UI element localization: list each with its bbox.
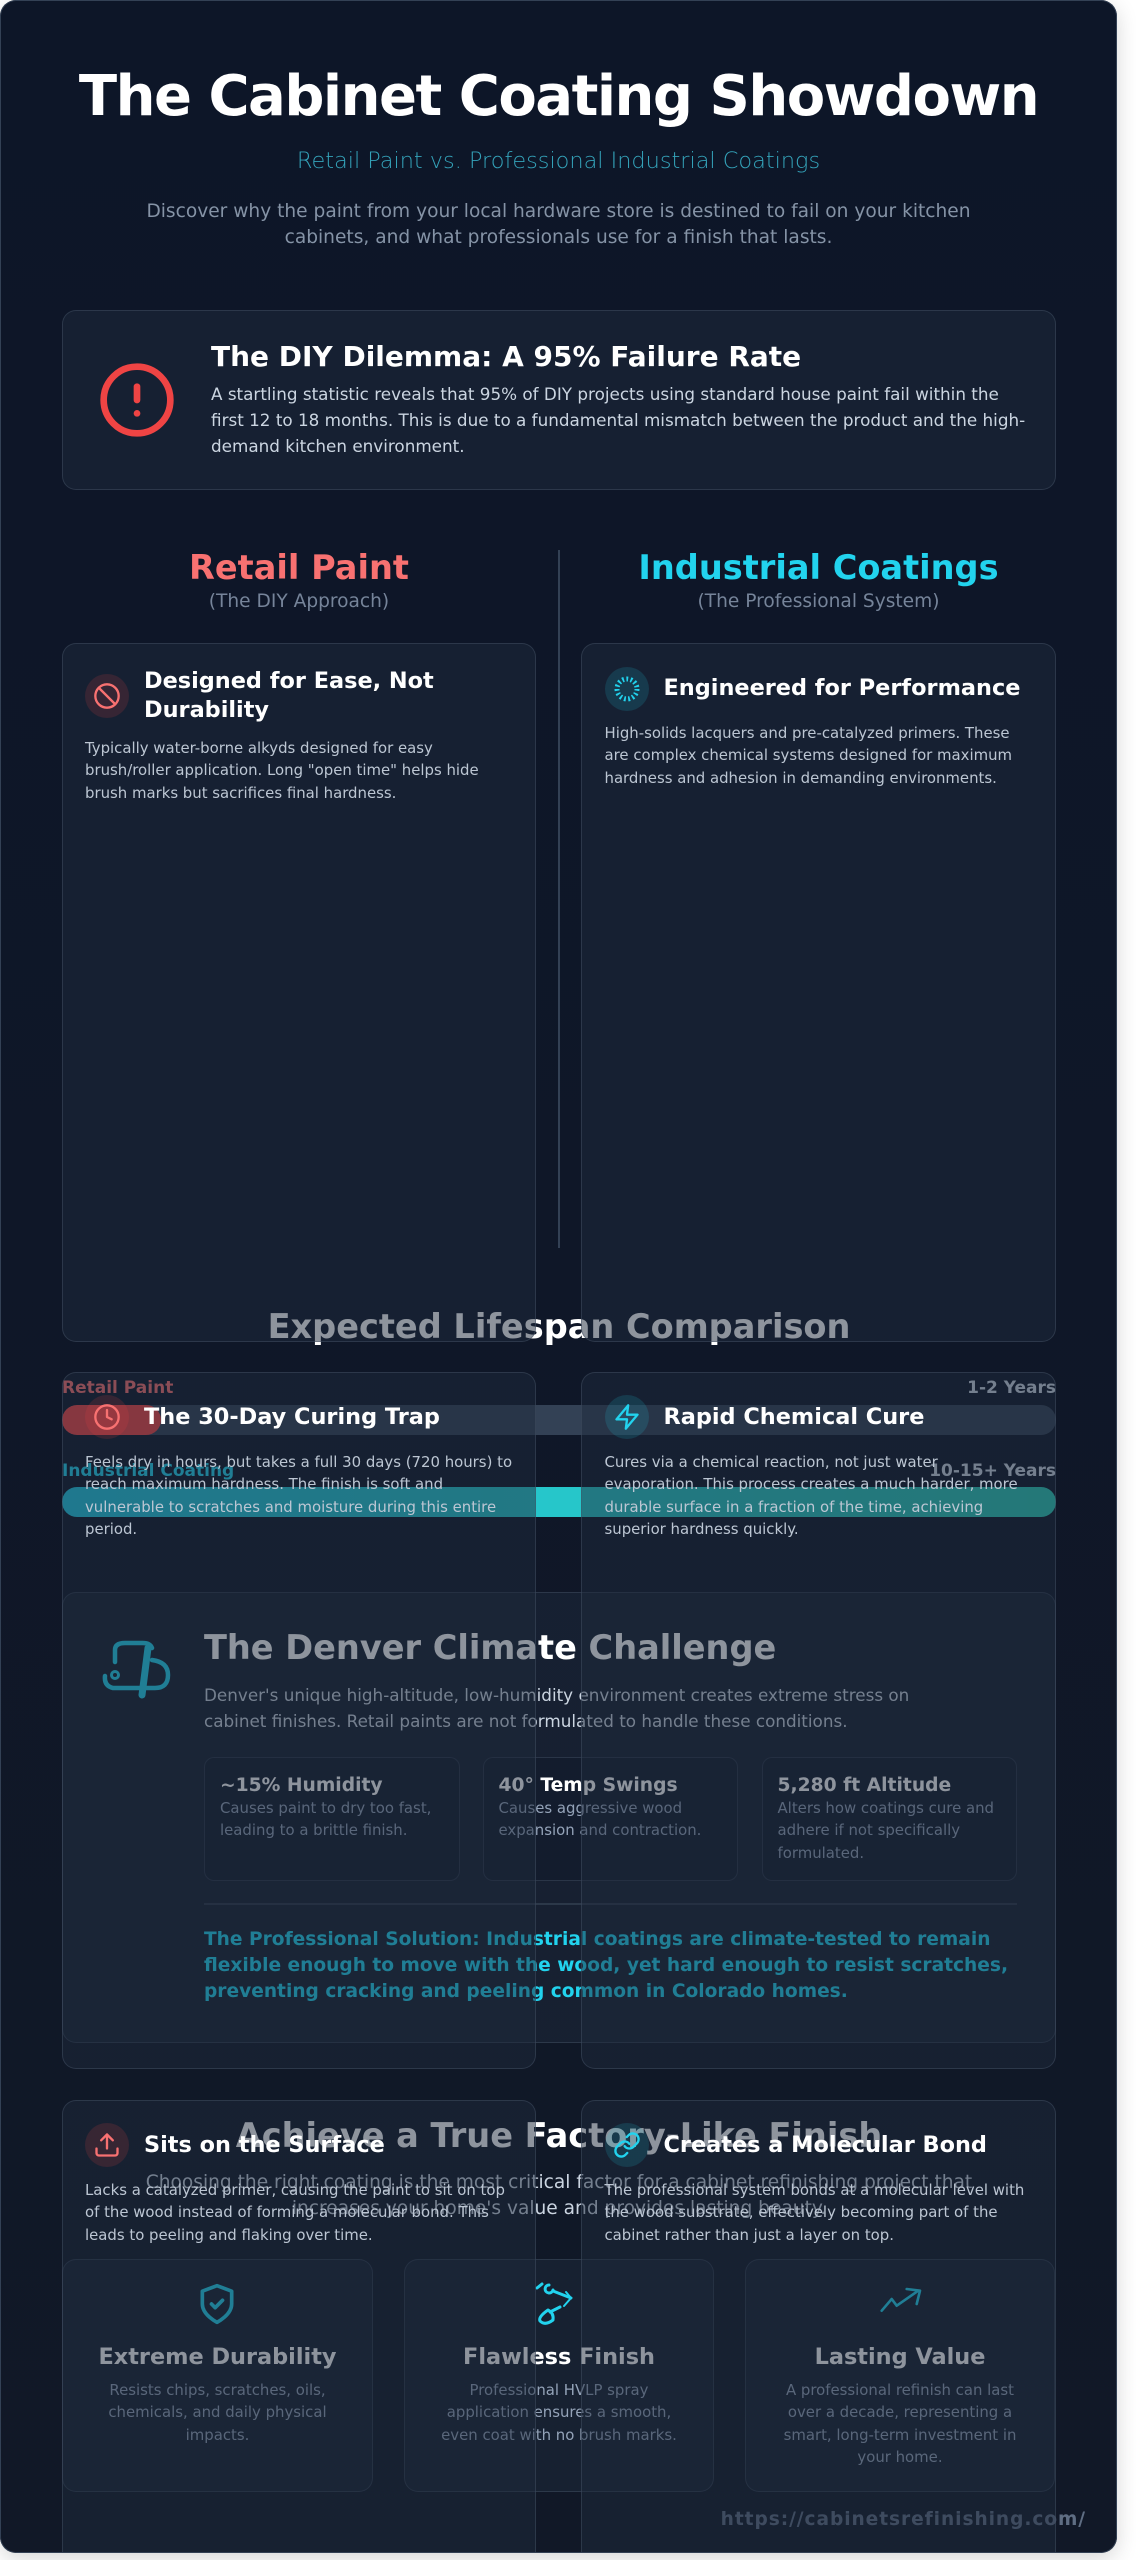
benefit: flawless finish: Professional HVLP spray <box>470 2381 648 2399</box>
card text: hardness and adhesion in demanding environments. <box>604 769 997 787</box>
card: molecular bond <box>581 2100 1056 2560</box>
card text: durable surface in a fraction of the time, achieving <box>604 1498 983 1516</box>
benefit: lasting value: your home. <box>857 2448 943 2466</box>
card text <box>85 2181 505 2244</box>
stat: humidity <box>204 1757 460 1881</box>
card text <box>85 1453 512 1538</box>
benefit: extreme durability: Resists chips, scratches, oils, <box>109 2381 326 2399</box>
dilemma heading: The DIY Dilemma: A 95% Failure Rate <box>211 340 801 373</box>
footer url: https://cabinetsrefinishing.com/ <box>721 2509 1086 2530</box>
card heading <box>144 668 434 723</box>
panel: Denver climate challenge <box>62 1592 1056 2043</box>
stat: humidity: ~15% Humidity <box>220 1775 383 1796</box>
benefit: extreme durability: impacts. <box>186 2426 249 2444</box>
icon: spray gun <box>536 2282 572 2325</box>
icon: dotted ring <box>605 667 649 711</box>
card heading: Rapid Chemical Cure <box>664 1404 924 1430</box>
icon: link <box>605 2123 649 2167</box>
icon: clock <box>85 1395 129 1439</box>
card text: superior hardness quickly. <box>604 1520 799 1538</box>
section: lifespan comparison <box>62 1307 1056 1517</box>
card: engineered for performance <box>581 643 1056 1342</box>
column heading: industrial coatings <box>638 548 999 612</box>
stat: altitude: 5,280 ft Altitude <box>778 1775 951 1796</box>
card text: Lacks a catalyzed primer, causing the paint to sit on top <box>85 2181 505 2199</box>
benefit: lasting value: over a decade, representing a <box>788 2403 1012 2421</box>
stat: humidity: leading to a brittle finish. <box>220 1821 407 1839</box>
card text <box>604 1453 1018 1538</box>
stat: altitude <box>762 1757 1017 1881</box>
professional solution text: flexible enough to move with the wood, yet hard enough to resist scratches, <box>204 1955 1008 1976</box>
card heading: Designed for Ease, Not <box>144 668 434 694</box>
benefit: flawless finish: Flawless Finish <box>463 2344 655 2370</box>
intro description: cabinets, and what professionals use for a finish that lasts. <box>285 227 832 248</box>
professional solution text: preventing cracking and peeling common in Colorado homes. <box>204 1981 848 2002</box>
icon: zap <box>605 1395 649 1439</box>
card text: Typically water-borne alkyds designed for easy <box>85 739 433 757</box>
stat: altitude: adhere if not specifically <box>778 1821 960 1839</box>
bar: retail paint: Retail Paint <box>62 1378 173 1398</box>
climate text: cabinet finishes. Retail paints are not formulated to handle these conditions. <box>204 1711 848 1731</box>
climate heading: The Denver Climate Challenge <box>204 1628 776 1667</box>
card: curing trap <box>62 1372 536 2069</box>
dilemma text: first 12 to 18 months. This is due to a fundamental mismatch between the product and the high- <box>211 410 1025 430</box>
panel: DIY dilemma <box>62 310 1056 490</box>
professional solution text <box>204 1929 1008 2002</box>
professional solution text: The Professional Solution: Industrial coatings are climate-tested to remain <box>204 1929 990 1950</box>
conclusion text: Choosing the right coating is the most critical factor for a cabinet refinishing project that <box>146 2172 972 2193</box>
benefit: flawless finish: even coat with no brush marks. <box>441 2426 677 2444</box>
card text: brush/roller application. Long "open time" helps hide <box>85 761 479 779</box>
bar: industrial coating <box>62 1461 1056 1517</box>
benefit: lasting value: smart, long-term investment in <box>784 2426 1016 2444</box>
climate text: Denver's unique high-altitude, low-humidity environment creates extreme stress on <box>204 1685 909 1705</box>
card heading: Sits on the Surface <box>144 2132 385 2158</box>
card text: the wood substrate, effectively becoming part of the <box>604 2203 998 2221</box>
benefit: lasting value: A professional refinish can last <box>786 2381 1014 2399</box>
card heading: Durability <box>144 697 269 723</box>
intro description <box>146 201 971 248</box>
benefit: lasting value: Lasting Value <box>815 2344 985 2370</box>
benefit: extreme durability <box>62 2259 373 2492</box>
benefit: extreme durability: Extreme Durability <box>98 2344 336 2370</box>
card: rapid chemical cure <box>581 1372 1056 2069</box>
conclusion text <box>146 2172 972 2219</box>
title: The Cabinet Coating Showdown <box>79 64 1038 129</box>
column heading: retail paint <box>189 548 409 612</box>
card text: of the wood instead of forming a molecular bond. This <box>85 2203 489 2221</box>
benefit cards row <box>62 2259 1055 2492</box>
climate text <box>204 1685 909 1731</box>
card text <box>604 724 1012 787</box>
icon: trending up <box>880 2288 922 2312</box>
stat: temperature swings: 40° Temp Swings <box>498 1775 678 1796</box>
icon: upload <box>85 2123 129 2167</box>
card: designed for ease <box>62 643 536 1342</box>
benefit: extreme durability: chemicals, and daily physical <box>108 2403 327 2421</box>
dilemma text: A startling statistic reveals that 95% of DIY projects using standard house paint fail within the <box>211 384 999 404</box>
stat: temperature swings: expansion and contraction. <box>498 1821 701 1839</box>
bar: industrial coating: Industrial Coating <box>62 1461 234 1481</box>
card heading: The 30-Day Curing Trap <box>144 1404 440 1430</box>
stat: altitude: Alters how coatings cure and <box>778 1799 994 1817</box>
section: factory finish conclusion <box>62 2116 1055 2492</box>
icon: alert circle <box>100 363 174 437</box>
column heading: retail paint: Retail Paint <box>189 548 409 587</box>
card text: High-solids lacquers and pre-catalyzed primers. These <box>604 724 1010 742</box>
dilemma text: demand kitchen environment. <box>211 436 465 456</box>
card text: cabinet rather than just a layer on top. <box>604 2226 894 2244</box>
card text: leads to peeling and flaking over time. <box>85 2226 373 2244</box>
icon: climate cloud and tool <box>102 1640 170 1698</box>
card text: reach maximum hardness. The finish is soft and <box>85 1475 443 1493</box>
icon: ban <box>85 674 129 718</box>
benefit: flawless finish: application ensures a smooth, <box>447 2403 671 2421</box>
conclusion text: increases your home's value and provides lasting beauty. <box>292 2198 826 2219</box>
stat: humidity: Causes paint to dry too fast, <box>220 1799 431 1817</box>
benefit: lasting value <box>745 2259 1055 2492</box>
card text: brush marks but sacrifices final hardness. <box>85 784 396 802</box>
benefit: flawless finish <box>404 2259 714 2492</box>
conclusion heading: Achieve a True Factory-Like Finish <box>236 2116 882 2155</box>
card text: The professional system bonds at a molecular level with <box>604 2181 1024 2199</box>
dilemma text <box>211 384 1025 456</box>
lifespan heading: Expected Lifespan Comparison <box>268 1307 850 1346</box>
column heading: industrial coatings: Industrial Coatings <box>638 548 999 587</box>
card text: Feels dry in hours, but takes a full 30 days (720 hours) to <box>85 1453 512 1471</box>
bar: retail paint <box>62 1378 1056 1435</box>
intro description: Discover why the paint from your local hardware store is destined to fail on your kitchen <box>146 201 971 222</box>
subtitle: Retail Paint vs. Professional Industrial Coatings <box>297 148 820 174</box>
column heading: industrial coatings: (The Professional System) <box>698 591 940 612</box>
card: sits on the surface <box>62 2100 536 2560</box>
card text: evaporation. This process creates a much harder, more <box>604 1475 1018 1493</box>
bar: retail paint: 1-2 Years <box>967 1378 1056 1398</box>
icon: shield check <box>200 2284 234 2324</box>
card text <box>84 739 479 802</box>
card heading: Creates a Molecular Bond <box>664 2132 987 2158</box>
bar: industrial coating: 10-15+ Years <box>929 1461 1056 1481</box>
stat: altitude: formulated. <box>778 1844 864 1862</box>
card text: vulnerable to scratches and moisture during this entire <box>85 1498 496 1516</box>
stat: temperature swings <box>482 1757 738 1881</box>
card heading: Engineered for Performance <box>664 675 1020 701</box>
card text: are complex chemical systems designed for maximum <box>604 746 1012 764</box>
card text: period. <box>85 1520 137 1538</box>
card text <box>604 2181 1024 2244</box>
stat: temperature swings: Causes aggressive wood <box>498 1799 682 1817</box>
column heading: retail paint: (The DIY Approach) <box>209 591 389 612</box>
card text: Cures via a chemical reaction, not just water <box>604 1453 938 1471</box>
